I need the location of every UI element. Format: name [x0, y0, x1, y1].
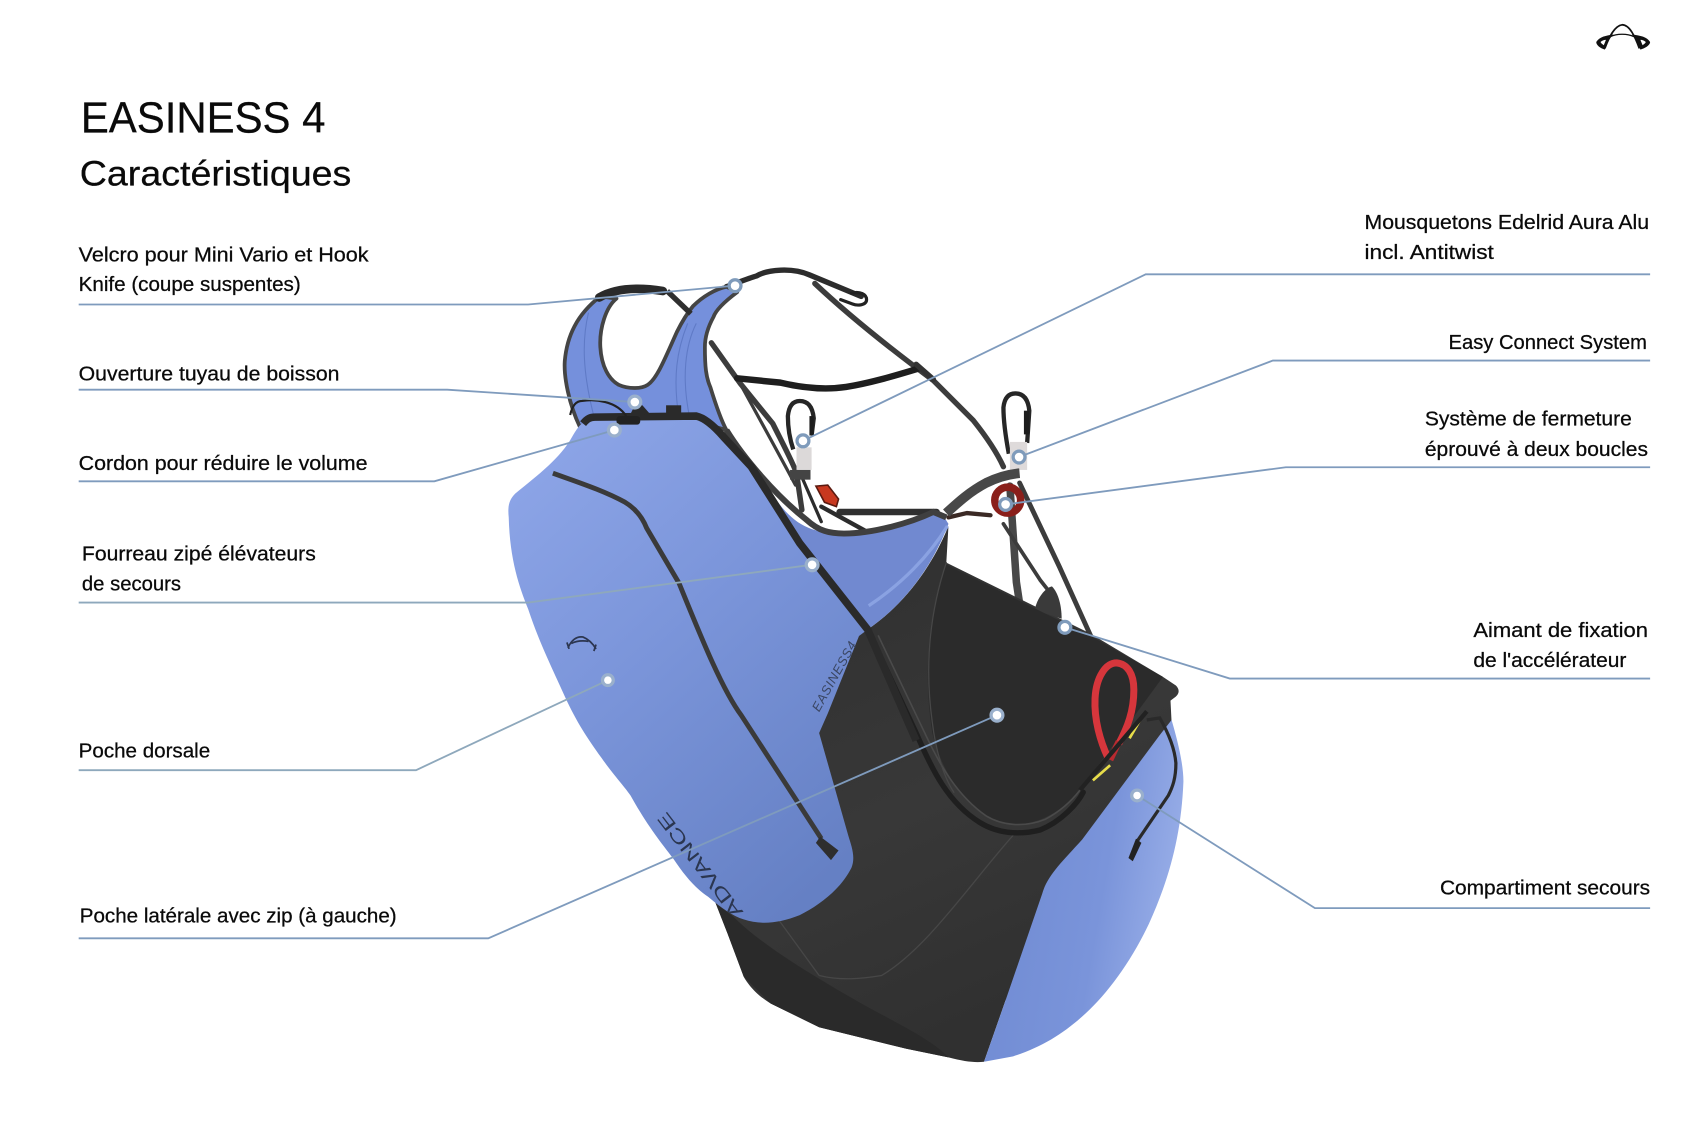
strap stitching — [584, 313, 696, 420]
seat bars — [840, 509, 937, 515]
seat fold lines — [776, 835, 1013, 979]
callout: Poche dorsale — [79, 675, 613, 770]
callout: Fourreau: Fourreau zipé élévateurs — [82, 542, 316, 566]
risers right — [1010, 486, 1020, 604]
main piping on back — [583, 416, 916, 741]
callout: Fourreau — [79, 542, 818, 603]
callout: Système de fermeture — [1000, 408, 1650, 510]
subtitle: Caractéristiques — [80, 153, 351, 193]
callout: Aimant — [1059, 619, 1650, 679]
icon: right carabiner — [1003, 393, 1029, 470]
icon: red accelerator loop — [1080, 663, 1147, 790]
callout: Mousquetons: Mousquetons Edelrid Aura Alu — [1365, 211, 1649, 234]
ADVANCE brand text: ADVANCE — [653, 809, 747, 922]
icon: hose opening and tag — [570, 400, 681, 425]
icon: red buckles — [816, 485, 1021, 513]
dark seat body — [708, 526, 1179, 1062]
callout: Poche latérale — [79, 709, 1003, 938]
seat cushion — [928, 565, 1163, 824]
icon: logo on back panel — [567, 637, 596, 651]
seat cushion piping — [868, 563, 1083, 833]
shoulder straps — [565, 287, 737, 430]
lighter strip on seat side — [869, 526, 947, 606]
callout: Easy Connect: Easy Connect System — [1449, 331, 1647, 354]
flap behind seat — [1035, 586, 1062, 619]
back protector panel — [508, 418, 868, 923]
callout: Poche latérale: Poche latérale avec zip (à gauche) — [80, 905, 397, 928]
callout: Aimant: Aimant de fixation — [1473, 619, 1648, 642]
callout: Mousquetons: incl. Antitwist — [1365, 241, 1494, 264]
callout: Velcro: Knife (coupe suspentes) — [79, 273, 301, 296]
harness illustration — [508, 270, 1183, 1062]
callout: Cordon: Cordon pour réduire le volume — [79, 452, 368, 475]
callout: Velcro: Velcro pour Mini Vario et Hook — [79, 243, 369, 266]
callout: Compartiment secours: Compartiment secours — [1440, 877, 1650, 900]
seat side edge piping — [726, 430, 946, 534]
darker lower fold band — [716, 903, 948, 1057]
blue seat side panel — [718, 415, 948, 629]
callout: Ouverture tuyau — [79, 362, 641, 408]
callout: Velcro — [79, 243, 741, 305]
title: EASINESS 4 — [81, 95, 325, 143]
callout: Easy Connect — [1013, 331, 1650, 463]
callout: Mousquetons — [797, 211, 1650, 447]
EASINESS4 model text: EASINESS4 — [809, 639, 859, 714]
callout: Poche dorsale: Poche dorsale — [79, 740, 210, 763]
icon: left carabiner — [788, 401, 814, 480]
seat bar front band — [946, 473, 1020, 513]
rear webbing and risers — [711, 270, 1091, 636]
callout: Système de fermeture: éprouvé à deux boucles — [1425, 438, 1648, 461]
icon: brand logo — [1596, 25, 1650, 50]
blue side compartment — [984, 720, 1183, 1062]
callout: Système de fermeture: Système de fermeture — [1425, 408, 1632, 431]
callout: Aimant: de l'accélérateur — [1473, 649, 1627, 672]
strap webbing — [667, 291, 691, 314]
chest strap — [737, 369, 918, 388]
callout: Fourreau: de secours — [82, 573, 181, 596]
zip: compartment secours — [1136, 718, 1176, 843]
callout: Cordon — [79, 424, 620, 481]
back zip — [553, 473, 821, 839]
callout: Ouverture tuyau: Ouverture tuyau de boisson — [79, 362, 340, 385]
strap top tab — [599, 289, 663, 297]
callout: Compartiment secours — [1132, 790, 1650, 908]
